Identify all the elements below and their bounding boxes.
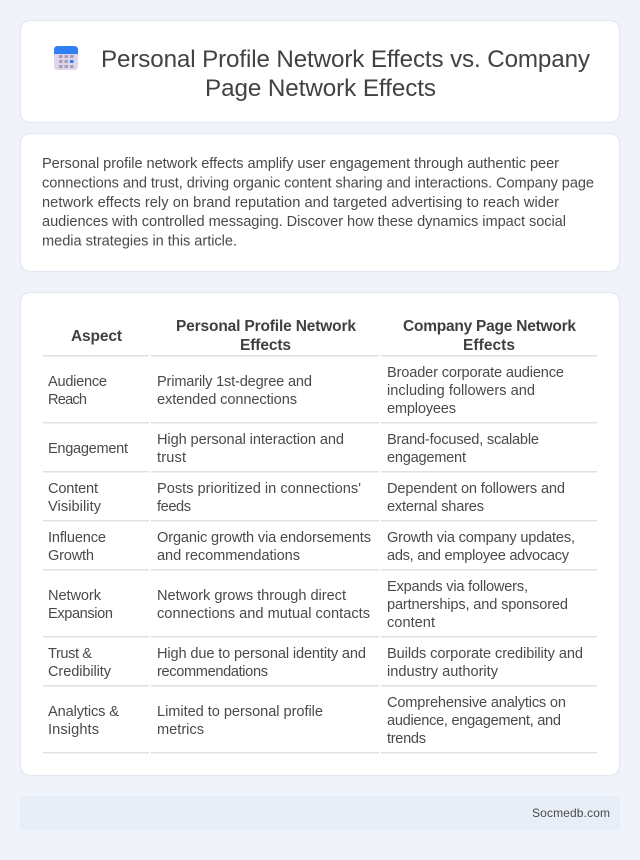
row: analytics and insights: Analytics & <box>48 704 119 720</box>
table header: Personal Profile Network <box>176 318 356 335</box>
row: analytics and insights: Comprehensive analytics on <box>387 695 566 711</box>
row: analytics and insights <box>48 695 566 747</box>
table header <box>71 318 576 354</box>
footer: Socmedb.com <box>532 806 610 820</box>
row: audience reach: Broader corporate audience <box>387 365 564 381</box>
row: trust and credibility: Trust & <box>48 646 92 662</box>
row: influence growth: Influence <box>48 530 106 546</box>
row: audience reach: Audience <box>48 374 107 390</box>
row: influence growth: Organic growth via endorsements <box>157 530 371 546</box>
table header: Aspect <box>71 328 122 345</box>
panel: title card <box>20 20 620 122</box>
row: content visibility: Dependent on followers and <box>387 481 565 497</box>
text block: introduction: network effects rely on brand reputation and targeted advertising to reach wider <box>42 195 559 211</box>
row: network expansion: Expands via followers, <box>387 579 528 595</box>
row: analytics and insights: Limited to personal profile <box>157 704 323 720</box>
row: engagement: High personal interaction and <box>157 432 344 448</box>
table header: Effects <box>463 337 515 354</box>
row: audience reach: Reach <box>48 392 87 408</box>
row: analytics and insights: Insights <box>48 722 99 738</box>
text block: introduction: audiences with controlled messaging. Discover how these dynamics impact social <box>42 214 566 230</box>
text block: introduction: Personal profile network effects amplify user engagement through authentic peer <box>42 156 559 172</box>
title: Personal Profile Network Effects vs. Company <box>101 46 591 73</box>
row: content visibility: feeds <box>157 499 191 515</box>
row: trust and credibility: industry authority <box>387 664 499 680</box>
row: influence growth: Growth via company updates, <box>387 530 575 546</box>
row: trust and credibility: recommendations <box>157 664 268 680</box>
row: network expansion: Network grows through direct <box>157 588 346 604</box>
row: trust and credibility: Builds corporate credibility and <box>387 646 583 662</box>
row: audience reach: including followers and <box>387 383 535 399</box>
text block: introduction: media strategies in this article. <box>42 234 237 250</box>
row: network expansion: partnerships, and sponsored <box>387 597 568 613</box>
row: audience reach: extended connections <box>157 392 297 408</box>
table header: Effects <box>240 337 291 354</box>
row: network expansion: Network <box>48 588 102 604</box>
row: influence growth <box>48 530 575 564</box>
row: engagement <box>48 432 539 466</box>
row: content visibility: Visibility <box>48 499 102 515</box>
row: engagement: Brand-focused, scalable <box>387 432 539 448</box>
row: content visibility: external shares <box>387 499 484 515</box>
title <box>101 46 591 102</box>
row: engagement: engagement <box>387 450 466 466</box>
row: content visibility: Content <box>48 481 98 497</box>
row: network expansion: connections and mutual contacts <box>157 606 370 622</box>
row: trust and credibility: Credibility <box>48 664 112 680</box>
icon: calendar <box>54 46 78 70</box>
row: trust and credibility: High due to personal identity and <box>157 646 366 662</box>
row: analytics and insights: metrics <box>157 722 204 738</box>
row: content visibility: Posts prioritized in connections' <box>157 481 361 497</box>
title: Page Network Effects <box>205 75 436 102</box>
row: influence growth: Growth <box>48 548 94 564</box>
row: trust and credibility <box>48 646 583 680</box>
row: audience reach: employees <box>387 401 456 417</box>
row: analytics and insights: audience, engagement, and <box>387 713 561 729</box>
row: analytics and insights: trends <box>387 731 426 747</box>
row: engagement: trust <box>157 450 186 466</box>
row: network expansion: Expansion <box>48 606 113 622</box>
table header: Company Page Network <box>403 318 576 335</box>
panel: comparison table <box>20 292 620 776</box>
footer <box>20 796 620 830</box>
row: influence growth: and recommendations <box>157 548 300 564</box>
text block: introduction: connections and trust, driving organic content sharing and interactions. Company page <box>42 176 594 192</box>
panel: introduction <box>20 134 620 272</box>
row: audience reach: Primarily 1st-degree and <box>157 374 312 390</box>
row: network expansion <box>48 579 568 631</box>
row: network expansion: content <box>387 615 435 631</box>
row: engagement: Engagement <box>48 441 128 457</box>
row: content visibility <box>48 481 565 515</box>
row: influence growth: ads, and employee advocacy <box>387 548 570 564</box>
text block: introduction <box>42 156 594 250</box>
row: audience reach <box>48 365 564 417</box>
